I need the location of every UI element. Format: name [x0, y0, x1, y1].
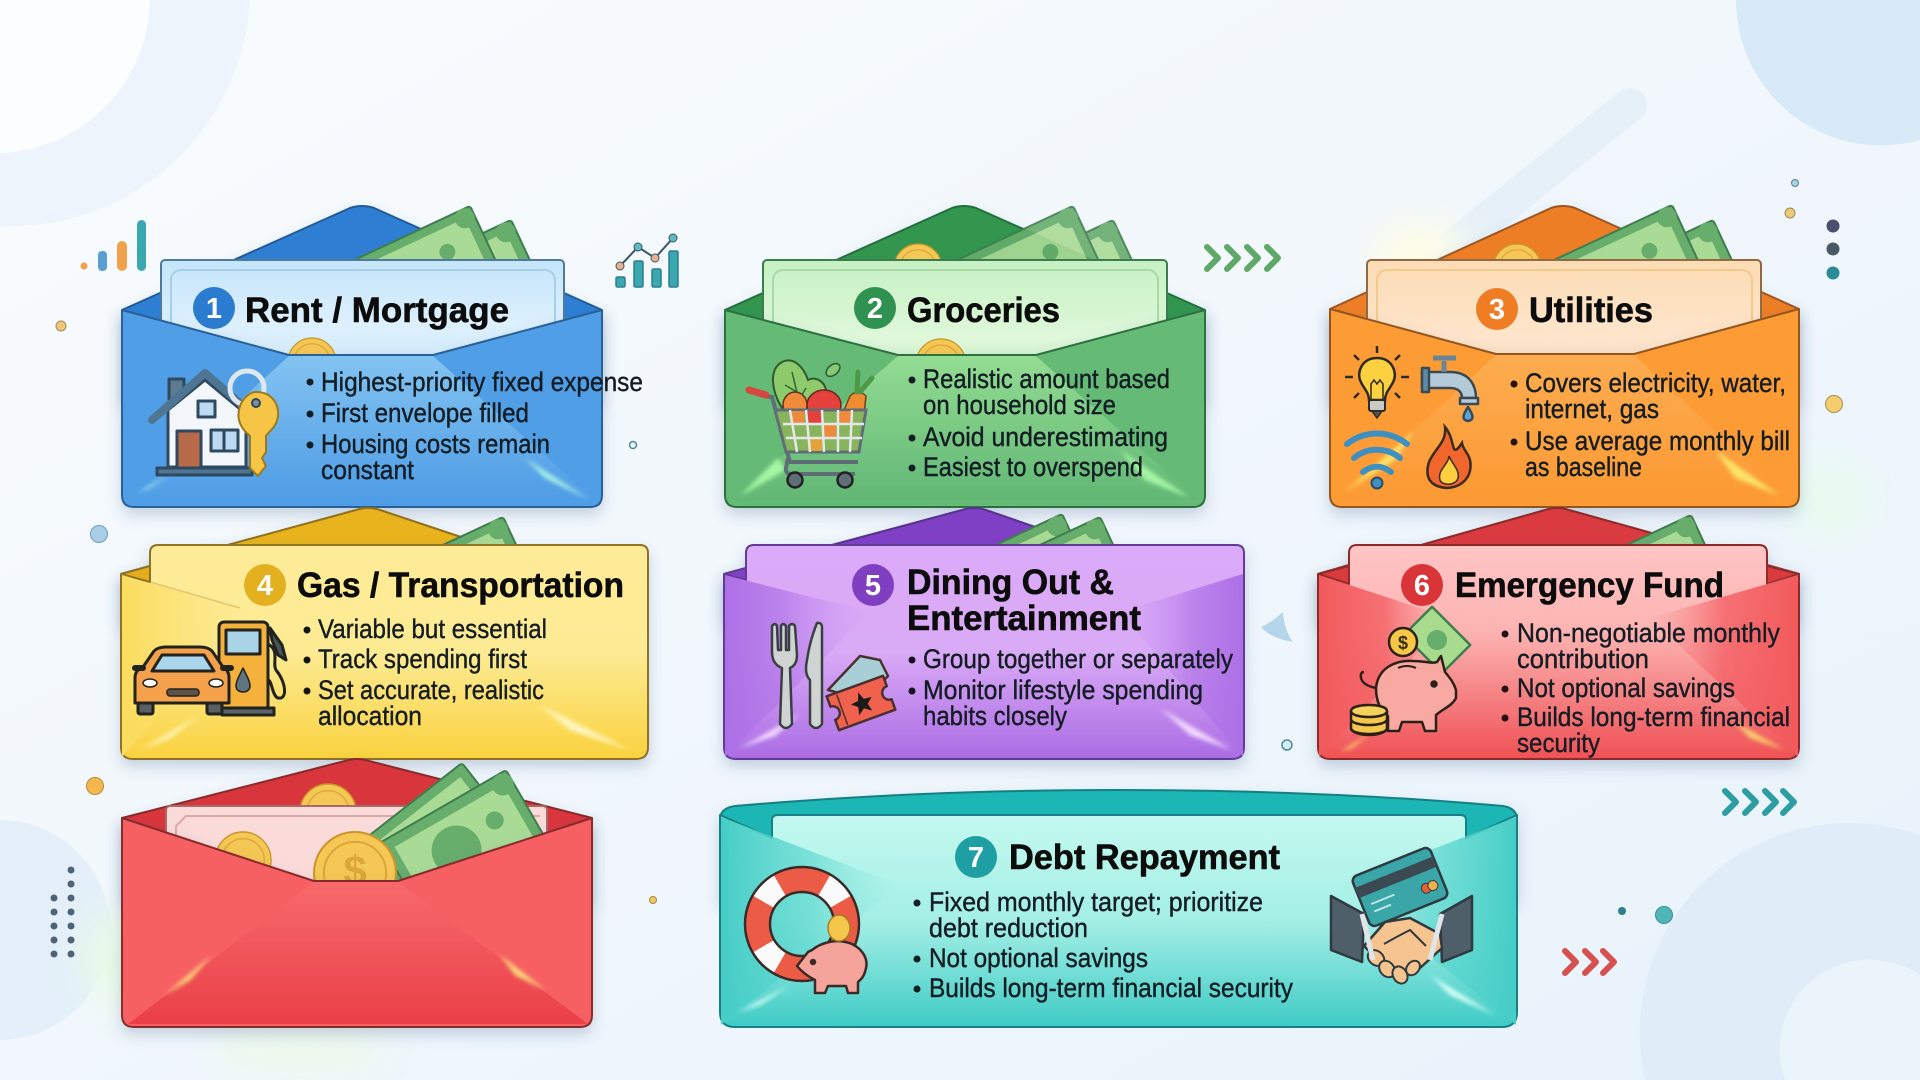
- flap fold: [1318, 566, 1799, 757]
- card: [763, 260, 1167, 390]
- bullets 1: First envelope filled: [321, 398, 529, 428]
- badge 1: 1: [206, 293, 222, 325]
- icon: piggy bank with coins: [1351, 607, 1470, 735]
- coin large: $: [343, 847, 367, 894]
- decoration: dots: [50, 180, 1842, 958]
- envelope 3: utilities: [1330, 204, 1799, 507]
- bullets 6: Non-negotiable monthly: [1517, 618, 1780, 648]
- bill: [340, 516, 542, 675]
- badge 7: [955, 836, 997, 878]
- decoration: bars top left: [80, 220, 146, 271]
- heading 4: Gas / Transportation: [297, 566, 624, 605]
- bullets 5: Group together or separately: [923, 644, 1233, 674]
- badge 3: 3: [1489, 294, 1505, 326]
- envelope body: [121, 545, 648, 759]
- badge 4: [244, 564, 286, 606]
- bullets 7: debt reduction: [929, 913, 1088, 943]
- bullets 2: [908, 364, 1170, 482]
- heading 3: Utilities: [1529, 291, 1653, 330]
- bullets 7: [914, 887, 1293, 1003]
- bills: [910, 205, 1152, 378]
- icon: life ring and piggy bank: [745, 867, 866, 993]
- bullets 4: Set accurate, realistic: [318, 675, 544, 705]
- light glints: [1340, 722, 1785, 752]
- bullets 4: [304, 614, 547, 731]
- coin small: [215, 832, 271, 888]
- icon: car and fuel pump: [135, 622, 286, 715]
- icon: house and key: [152, 371, 278, 476]
- light glints: [138, 458, 590, 500]
- icon: fork and knife: [772, 623, 822, 728]
- arrows: teal chevrons: [1725, 791, 1794, 813]
- heading 5: Dining Out &: [907, 563, 1114, 602]
- bullets 3: internet, gas: [1525, 394, 1659, 424]
- heading 5: Entertainment: [907, 599, 1141, 638]
- icon: tickets: [827, 656, 895, 730]
- front bill: [380, 770, 582, 972]
- badge 5: 5: [865, 570, 881, 602]
- flap fold: [721, 817, 1516, 1025]
- bills: [307, 205, 550, 378]
- icon: flame: [1427, 427, 1471, 488]
- back flap: [1330, 206, 1799, 400]
- coin: [288, 338, 336, 386]
- envelope body: [724, 545, 1244, 759]
- envelope 7: debt repayment: [720, 790, 1517, 1027]
- front pocket: [1330, 309, 1799, 507]
- badge 2: [854, 287, 896, 329]
- bullets 4: Track spending first: [318, 644, 527, 674]
- bullets 6: Not optional savings: [1517, 673, 1735, 703]
- light glints: [738, 975, 1495, 1015]
- light glints: [1345, 430, 1780, 496]
- bullets 1: [306, 367, 643, 485]
- bullets 5: habits closely: [923, 701, 1067, 731]
- heading 6: Emergency Fund: [1455, 566, 1724, 605]
- icon: piggy bank with coins: $: [1398, 633, 1408, 653]
- front pocket: [122, 310, 602, 507]
- badge 5: [852, 564, 894, 606]
- bullets 6: security: [1517, 728, 1600, 758]
- envelope 1: rent / mortgage: [122, 205, 643, 507]
- bills: [899, 513, 1139, 675]
- back flap: [122, 206, 602, 400]
- envelope 2: groceries: [725, 205, 1205, 507]
- back flap: [121, 508, 560, 620]
- arrows: red chevrons: [1565, 951, 1614, 973]
- bullets 1: Highest-priority fixed expense: [321, 367, 643, 397]
- light glints: [165, 955, 545, 995]
- bullets 5: [908, 644, 1233, 731]
- back flap: [725, 206, 1205, 400]
- flap fold: [724, 568, 1243, 757]
- envelope 4: gas / transportation: [121, 508, 648, 759]
- bullets 3: [1510, 368, 1790, 482]
- arrows: green chevrons: [1207, 247, 1278, 269]
- bullets 7: Not optional savings: [929, 943, 1148, 973]
- bullets 1: constant: [321, 455, 414, 485]
- back flap: [122, 759, 592, 900]
- bullets 6: [1502, 618, 1790, 758]
- bullets 3: as baseline: [1525, 452, 1642, 482]
- heading 7: Debt Repayment: [1009, 838, 1280, 877]
- badge 6: 6: [1414, 570, 1430, 602]
- badge 3: [1476, 288, 1518, 330]
- back flap: [1318, 508, 1799, 620]
- flap fold: [121, 566, 250, 757]
- coin large: [314, 832, 396, 914]
- light glints: [740, 450, 1190, 498]
- icon: wifi: [1347, 434, 1407, 488]
- card: [166, 806, 547, 896]
- back coin: [300, 784, 356, 840]
- back flap: [720, 790, 1517, 900]
- envelope body: [720, 815, 1517, 1027]
- card: [161, 260, 564, 390]
- bullets 4: allocation: [318, 701, 422, 731]
- bullets 6: contribution: [1517, 644, 1649, 674]
- bullets 5: Monitor lifestyle spending: [923, 675, 1203, 705]
- heading 5: [907, 563, 1141, 638]
- bullets 7: Builds long-term financial security: [929, 973, 1293, 1003]
- icon: credit card and handshake: [1331, 846, 1472, 986]
- light glints: [740, 708, 1232, 750]
- envelope 5: dining out and entertainment: [724, 508, 1244, 759]
- bullets 2: Realistic amount based: [923, 364, 1170, 394]
- bills: [1509, 204, 1752, 378]
- back coin: [894, 244, 942, 292]
- bullets 6: Builds long-term financial: [1517, 702, 1790, 732]
- badge 7: 7: [968, 842, 984, 874]
- bullets 2: Easiest to overspend: [923, 452, 1143, 482]
- badge 4: 4: [257, 570, 273, 602]
- badge 1: [193, 287, 235, 329]
- badge 6: [1401, 564, 1443, 606]
- heading 1: Rent / Mortgage: [245, 291, 509, 330]
- back coin: [1493, 244, 1541, 292]
- card and envelope body: [1318, 545, 1799, 759]
- light glints: [140, 705, 630, 750]
- bullets 7: Fixed monthly target; prioritize: [929, 887, 1263, 917]
- bullets 2: Avoid underestimating: [923, 422, 1168, 452]
- empty red envelope: [122, 759, 592, 1027]
- bullets 3: Use average monthly bill: [1525, 426, 1790, 456]
- bill: [1528, 514, 1730, 673]
- icon: faucet: [1422, 358, 1478, 421]
- badge 2: 2: [867, 293, 883, 325]
- icon: light bulb: [1345, 346, 1409, 418]
- bullets 3: Covers electricity, water,: [1525, 368, 1786, 398]
- front pocket: [122, 818, 592, 1027]
- heading 2: Groceries: [907, 291, 1060, 330]
- bullets 1: Housing costs remain: [321, 429, 550, 459]
- decoration: mini chart: [616, 234, 678, 287]
- back bill: [363, 763, 542, 942]
- bullets 4: Variable but essential: [318, 614, 547, 644]
- front pocket: [725, 310, 1205, 507]
- back flap: [724, 508, 1160, 620]
- bullets 2: on household size: [923, 390, 1116, 420]
- envelope 6: emergency fund: [1318, 508, 1799, 759]
- coin: [916, 339, 966, 389]
- icon: shopping cart: [749, 360, 872, 488]
- card: [1367, 260, 1761, 390]
